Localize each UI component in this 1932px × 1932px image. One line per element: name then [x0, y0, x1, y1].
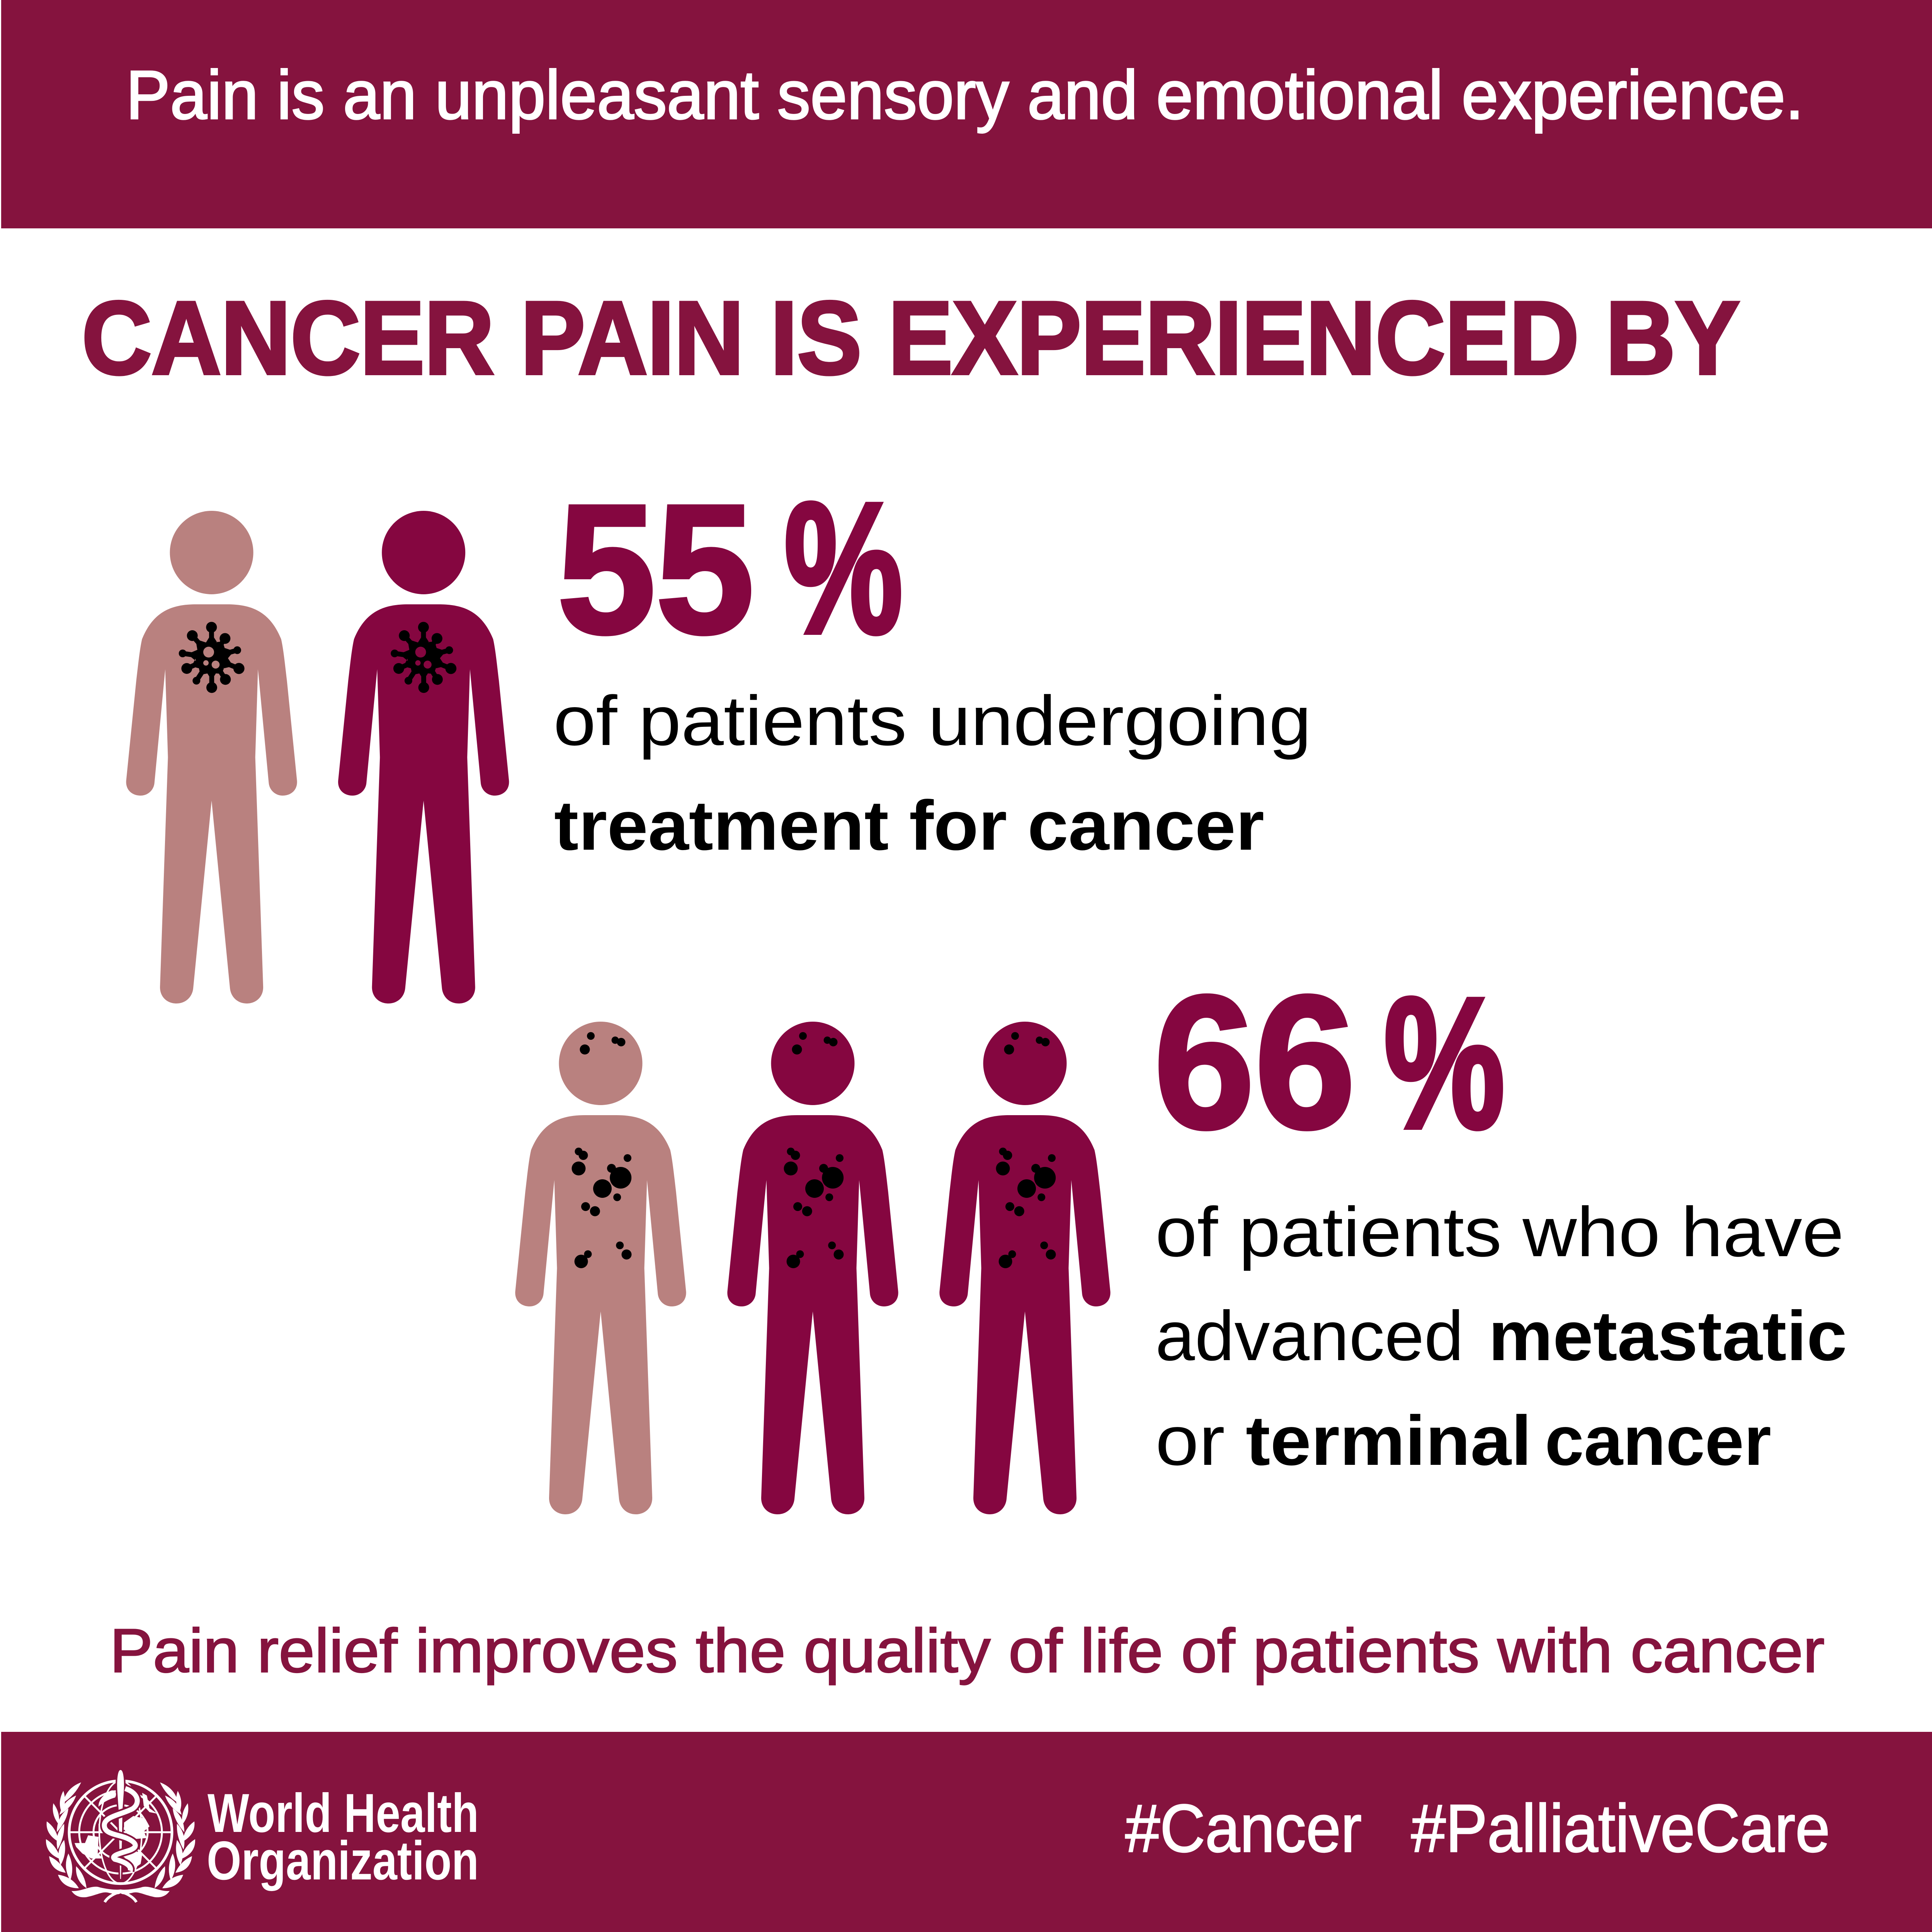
66 percent description	[1155, 1192, 1847, 1480]
panel: 55 percent	[126, 464, 1311, 1003]
icon: dark figure with virus	[338, 511, 509, 1003]
WHO wordmark: Organization	[207, 1830, 479, 1891]
55 percent number: %	[784, 464, 903, 672]
55 percent description: of patients undergoing	[553, 681, 1311, 760]
66 percent number: 66	[1154, 956, 1355, 1168]
66 percent description: terminal	[1246, 1401, 1532, 1480]
hashtags: #Cancer	[1125, 1791, 1362, 1866]
66 percent description: or	[1155, 1401, 1225, 1480]
WHO wordmark	[207, 1782, 479, 1891]
55 percent description: treatment for cancer	[554, 786, 1264, 865]
closing statement: Pain relief improves the quality of life of patients with cancer	[110, 1616, 1825, 1685]
icon: dark figure with metastases	[939, 1022, 1111, 1514]
hashtags: #PalliativeCare	[1411, 1791, 1830, 1866]
66 percent description: advanced	[1155, 1296, 1464, 1375]
icon: dark figure with metastases	[727, 1022, 898, 1514]
title: CANCER PAIN IS EXPERIENCED BY	[82, 280, 1740, 396]
55 percent number: 55	[557, 466, 754, 672]
55 percent number	[557, 464, 903, 672]
WHO logo	[46, 1769, 479, 1902]
header band	[1, 0, 1932, 228]
WHO wordmark: World Health	[207, 1782, 479, 1844]
hashtags	[1125, 1791, 1830, 1866]
66 percent description: cancer	[1545, 1401, 1771, 1480]
66 percent number: %	[1384, 959, 1505, 1167]
icon: light figure with virus	[126, 511, 297, 1003]
66 percent description: of patients who have	[1155, 1192, 1844, 1271]
header text: Pain is an unpleasant sensory and emotional experience.	[126, 56, 1804, 133]
66 percent number	[1154, 956, 1505, 1168]
55 percent description	[553, 681, 1311, 865]
icon: light figure with metastases	[515, 1022, 686, 1514]
icon: WHO emblem	[46, 1769, 195, 1902]
figures: treatment patients	[126, 511, 509, 1003]
panel: 66 percent	[515, 956, 1847, 1514]
footer band	[1, 1732, 1932, 1932]
66 percent description: metastatic	[1488, 1296, 1847, 1375]
figures: metastatic patients	[515, 1022, 1111, 1514]
